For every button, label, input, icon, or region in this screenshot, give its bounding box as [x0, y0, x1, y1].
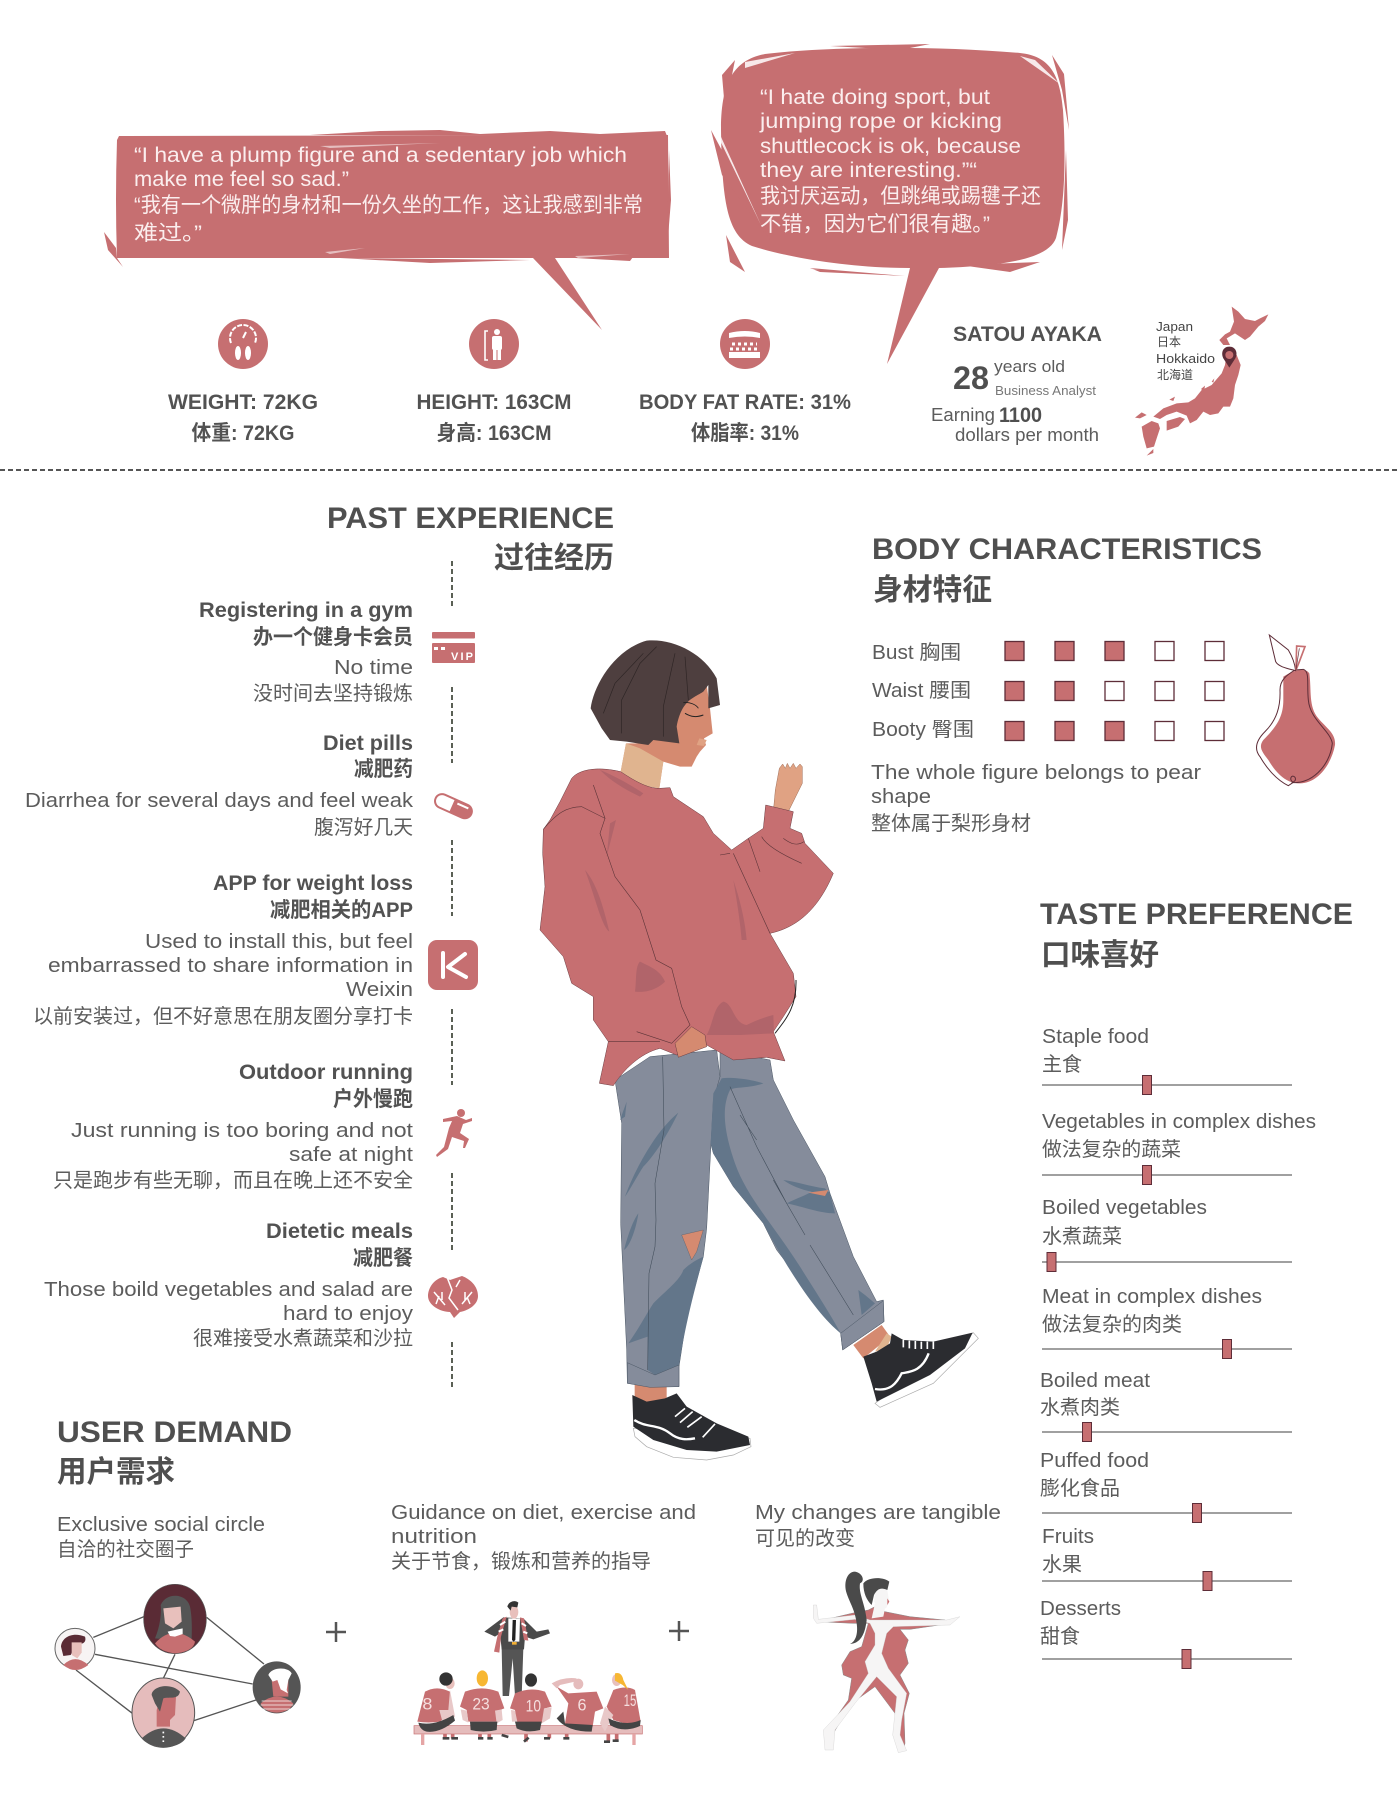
text: pear shape description: shape: [871, 786, 931, 808]
heading: past experience: [327, 502, 614, 575]
past experience: app: 以前安装过，但不好意思在朋友圈分享打卡: [33, 1005, 413, 1028]
text: pear shape description: The whole figure belongs to pear: [871, 762, 1201, 784]
past experience: dietetic meals: [44, 1220, 413, 1350]
slider: boiled meat: 水煮肉类: [1040, 1396, 1120, 1419]
slider: puffed food: 膨化食品: [1040, 1477, 1120, 1500]
profile: Satou Ayaka: years old: [994, 357, 1065, 376]
map labels: Japan: [1156, 319, 1193, 334]
slider: boiled meat: [1040, 1370, 1292, 1442]
profile: Satou Ayaka: Earning: [931, 405, 995, 425]
heading: body characteristics: BODY CHARACTERISTICS: [872, 533, 1262, 566]
torso: [540, 640, 833, 1086]
slider: staple food: [1042, 1026, 1292, 1094]
profile: Satou Ayaka: 1100: [999, 404, 1042, 427]
profile: Satou Ayaka: 28: [953, 360, 989, 396]
icon: body fat: [720, 319, 770, 369]
slider: staple food: Staple food: [1042, 1026, 1149, 1048]
heading: taste preference: [1040, 898, 1353, 972]
icon: plus: [326, 1622, 346, 1642]
map labels: Hokkaido: [1156, 351, 1215, 366]
past experience: diet pills: 减肥药: [354, 758, 413, 781]
icon: pill: [431, 791, 475, 822]
stat: weight: [168, 391, 318, 445]
slider: fruits: Fruits: [1042, 1526, 1094, 1548]
map: Japan: [1135, 307, 1268, 456]
past experience: dietetic meals: hard to enjoy: [283, 1303, 413, 1325]
demand text: social circle: Exclusive social circle: [57, 1514, 265, 1536]
slider: meat in complex dishes: [1042, 1286, 1292, 1358]
demand text: tangible changes: My changes are tangible: [755, 1502, 1001, 1524]
body characteristic ratings: [872, 641, 1224, 741]
map labels: [1156, 319, 1215, 382]
heading: taste preference: 口味喜好: [1041, 939, 1159, 972]
stat: body fat rate: BODY FAT RATE: 31%: [639, 391, 851, 414]
demand text: tangible changes: 可见的改变: [755, 1527, 855, 1550]
past experience: gym: 办一个健身卡会员: [253, 626, 413, 649]
past experience: app: APP for weight loss: [213, 872, 413, 895]
text: pear shape description: [871, 762, 1201, 835]
speech bubble: sport quote: [711, 44, 1069, 364]
illustration: coach and team: [414, 1601, 642, 1745]
past experience: gym: 没时间去坚持锻炼: [253, 682, 413, 705]
slider: puffed food: Puffed food: [1040, 1450, 1149, 1472]
body characteristic ratings: Bust 胸围: [872, 641, 961, 664]
profile: Satou Ayaka: [931, 323, 1102, 445]
speech bubble: plump figure quote: “我有一个微胖的身材和一份久坐的工作，这让我感到非常: [134, 194, 643, 217]
slider: fruits: [1042, 1526, 1292, 1590]
heading: user demand: USER DEMAND: [57, 1416, 292, 1449]
icon: VIP card: VIP: [451, 651, 473, 663]
slider: desserts: 甜食: [1040, 1625, 1080, 1648]
icon: height: [469, 319, 519, 369]
body characteristic ratings: Waist 腰围: [872, 680, 971, 702]
past experience: running: safe at night: [289, 1144, 414, 1166]
heading: body characteristics: [872, 533, 1262, 607]
map labels: 日本: [1157, 335, 1181, 349]
past experience: dietetic meals: Dietetic meals: [266, 1220, 413, 1243]
heading: body characteristics: 身材特征: [873, 574, 992, 607]
icon: plus: [669, 1621, 689, 1641]
slider: meat in complex dishes: Meat in complex dishes: [1042, 1286, 1262, 1308]
past experience: diet pills: 腹泻好几天: [314, 816, 413, 839]
demand text: guidance: 关于节食，锻炼和营养的指导: [391, 1550, 651, 1573]
illustration: coach and team: 10: [526, 1696, 541, 1715]
jersey numbers: 8: [422, 1694, 432, 1713]
speech bubble: plump figure quote: make me feel so sad.”: [134, 168, 349, 191]
text: pear shape description: 整体属于梨形身材: [871, 812, 1031, 835]
stat: height: HEIGHT: 163CM: [416, 391, 572, 414]
map labels: 北海道: [1157, 367, 1193, 382]
illustration: coach and team: 23: [472, 1694, 490, 1713]
demand text: guidance: Guidance on diet, exercise and: [391, 1502, 696, 1524]
past experience: dietetic meals: 很难接受水煮蔬菜和沙拉: [193, 1327, 413, 1350]
past experience: gym: Registering in a gym: [199, 599, 413, 622]
stat: weight: 体重: 72KG: [192, 422, 294, 445]
heading: taste preference: TASTE PREFERENCE: [1040, 898, 1353, 931]
profile: Satou Ayaka: SATOU AYAKA: [953, 323, 1102, 346]
heading: user demand: [57, 1416, 292, 1489]
slider: desserts: [1040, 1598, 1292, 1668]
speech bubble: sport quote: jumping rope or kicking: [759, 110, 1002, 133]
past experience: dietetic meals: 减肥餐: [353, 1247, 413, 1270]
illustration: coach and team: 6: [577, 1696, 586, 1715]
slider: fruits: 水果: [1042, 1553, 1082, 1576]
demand text: social circle: [57, 1514, 265, 1561]
speech bubble: sport quote: they are interesting.”“: [760, 159, 977, 182]
speech bubble: sport quote: 我讨厌运动，但跳绳或踢毽子还: [760, 185, 1041, 208]
icon: VIP card: [432, 632, 475, 663]
legs: [615, 1050, 978, 1460]
stat: weight: WEIGHT: 72KG: [168, 391, 318, 414]
main illustration: woman in pink sweatshirt: [540, 640, 978, 1460]
demand text: social circle: 自洽的社交圈子: [57, 1538, 194, 1561]
speech bubble: plump figure quote: [104, 130, 671, 330]
slider: puffed food: [1040, 1450, 1292, 1522]
past experience: app: Used to install this, but feel: [145, 931, 413, 953]
illustration: coach and team: 15: [624, 1691, 636, 1710]
past experience: dietetic meals: Those boild vegetables and salad are: [44, 1279, 413, 1301]
past experience: gym: [199, 599, 413, 705]
past experience: gym: No time: [334, 657, 413, 679]
heading: past experience: 过往经历: [494, 542, 614, 575]
slider: boiled vegetables: Boiled vegetables: [1042, 1197, 1207, 1219]
speech bubble: plump figure quote: “I have a plump figure and a sedentary job which: [134, 144, 627, 167]
speech bubble: sport quote: 不错，因为它们很有趣。”: [760, 213, 990, 236]
demand text: guidance: nutrition: [391, 1526, 477, 1548]
past experience: running: Just running is too boring and not: [71, 1120, 413, 1142]
past experience: app: embarrassed to share information in: [48, 955, 413, 977]
illustration: dancer: [813, 1572, 960, 1753]
past experience: diet pills: [25, 732, 414, 839]
icon: cabbage: [428, 1276, 478, 1318]
demand text: tangible changes: [755, 1502, 1001, 1550]
shoes: [633, 1428, 751, 1460]
past experience: running: Outdoor running: [239, 1061, 413, 1084]
icon: weight scale: [218, 319, 268, 369]
slider: vegetables in complex dishes: Vegetables in complex dishes: [1042, 1111, 1316, 1133]
slider: meat in complex dishes: 做法复杂的肉类: [1042, 1313, 1182, 1336]
slider: boiled vegetables: 水煮蔬菜: [1042, 1225, 1122, 1248]
past experience: running: 只是跑步有些无聊，而且在晚上还不安全: [53, 1169, 413, 1192]
icon: runner: [436, 1109, 472, 1157]
past experience: app: 减肥相关的APP: [270, 899, 413, 922]
illustration: social network: [55, 1584, 301, 1747]
stat: height: [416, 391, 572, 445]
slider: staple food: 主食: [1042, 1053, 1082, 1076]
profile: Satou Ayaka: dollars per month: [955, 425, 1099, 445]
heading: user demand: 用户需求: [57, 1456, 175, 1489]
past experience: app: Weixin: [346, 979, 413, 1001]
slider: vegetables in complex dishes: [1042, 1111, 1316, 1184]
past experience: running: [53, 1061, 414, 1192]
speech bubble: sport quote: shuttlecock is ok, because: [760, 135, 1021, 158]
icon: Keep app: [428, 940, 478, 990]
slider: boiled vegetables: [1042, 1197, 1292, 1272]
players: [417, 1688, 450, 1722]
past experience: running: 户外慢跑: [333, 1088, 413, 1111]
slider: desserts: Desserts: [1040, 1598, 1121, 1620]
stat: body fat rate: [639, 391, 851, 445]
profile: Satou Ayaka: Business Analyst: [995, 383, 1096, 398]
heading: past experience: PAST EXPERIENCE: [327, 502, 614, 535]
past experience: diet pills: Diet pills: [323, 732, 413, 755]
icon: pear: [1256, 635, 1335, 786]
past experience: app: [33, 872, 413, 1028]
slider: boiled meat: Boiled meat: [1040, 1370, 1150, 1392]
slider: vegetables in complex dishes: 做法复杂的蔬菜: [1042, 1138, 1181, 1161]
speech bubble: sport quote: “I hate doing sport, but: [760, 86, 990, 109]
body characteristic ratings: Booty 臀围: [872, 719, 974, 741]
coach: [502, 1648, 523, 1697]
demand text: guidance: [391, 1502, 696, 1573]
past experience: diet pills: Diarrhea for several days and feel weak: [25, 790, 414, 812]
stat: body fat rate: 体脂率: 31%: [691, 422, 799, 445]
stat: height: 身高: 163CM: [436, 421, 552, 445]
speech bubble: plump figure quote: 难过。”: [134, 222, 202, 245]
